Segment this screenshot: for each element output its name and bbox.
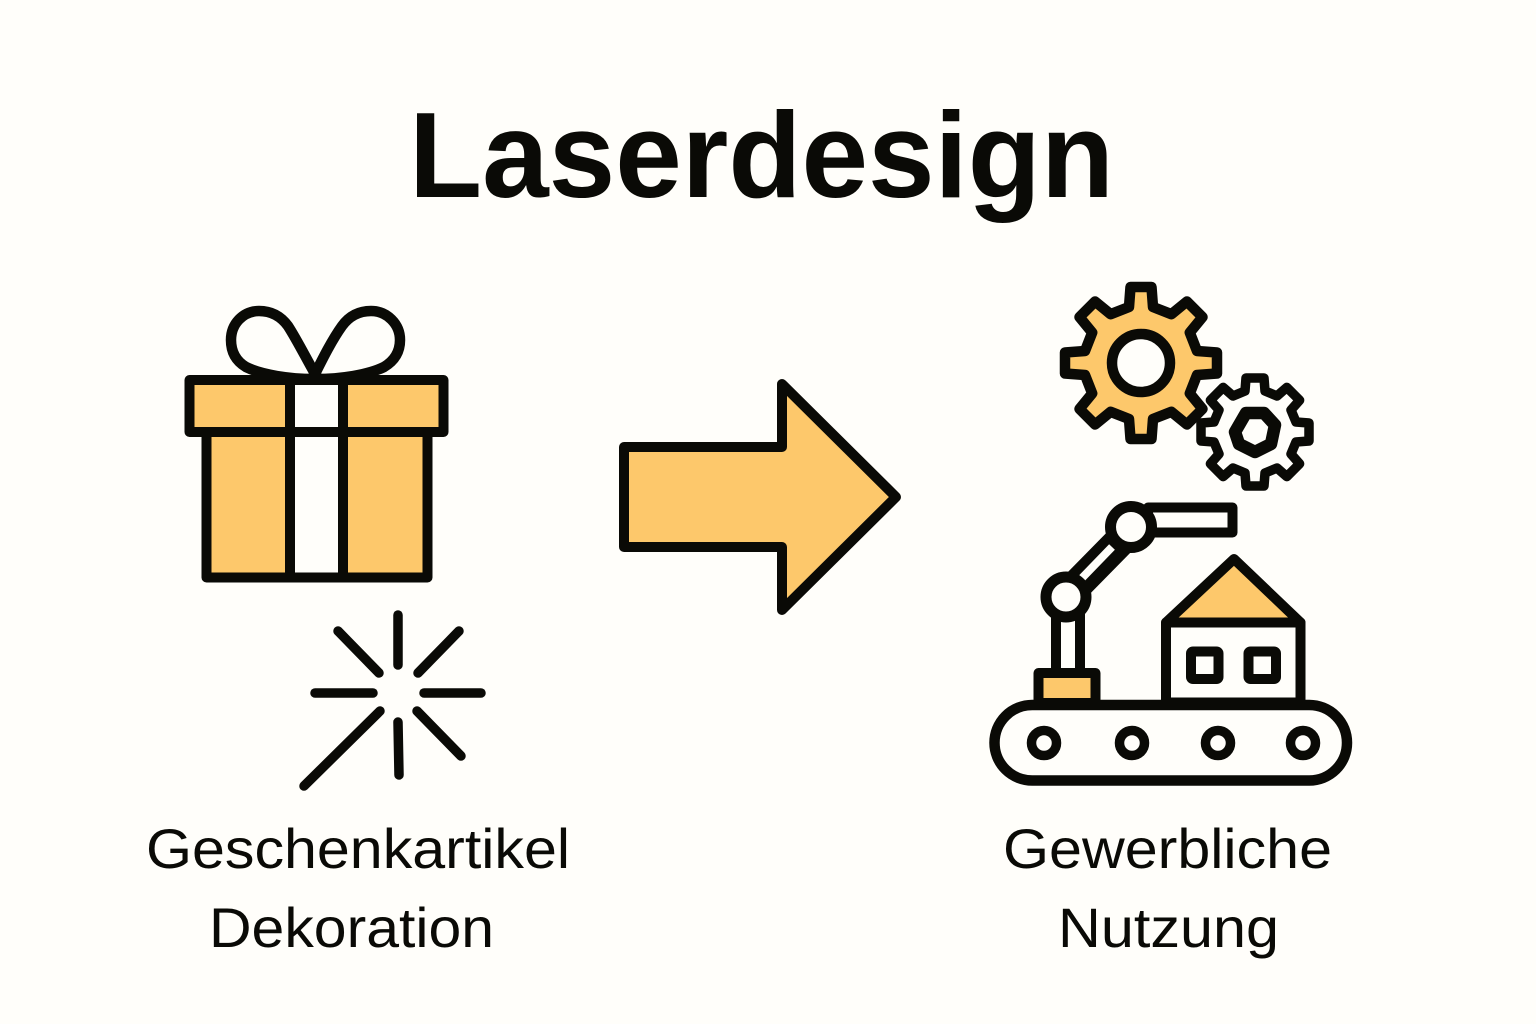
- icon: gift box: [190, 311, 444, 578]
- robot lower joint: [1046, 577, 1086, 617]
- robot forearm: [1148, 508, 1232, 532]
- house window left: [1191, 652, 1218, 679]
- robot base: [1038, 673, 1096, 703]
- icon: large gear: [1065, 287, 1217, 439]
- icon: laser sparkle: [304, 615, 481, 786]
- house window right: [1248, 652, 1276, 679]
- title: Laserdesign: [409, 87, 1114, 223]
- icon: robot arm: [1038, 506, 1232, 703]
- label: gift items: [146, 817, 570, 959]
- label: gift items: Dekoration: [209, 896, 494, 959]
- label: gift items: Geschenkartikel: [146, 817, 570, 880]
- panel: commercial use: [994, 287, 1347, 959]
- panel: gift items: [146, 311, 570, 959]
- icon: small gear: [1201, 378, 1309, 486]
- icon: factory house: [1166, 559, 1300, 702]
- gift lid: [190, 380, 444, 432]
- house roof: [1166, 559, 1300, 622]
- gift body: [206, 432, 428, 578]
- house wall: [1166, 622, 1300, 702]
- robot upper arm: [1070, 533, 1128, 592]
- label: commercial use: [1003, 817, 1332, 959]
- label: commercial use: Gewerbliche: [1003, 817, 1332, 880]
- arrow: [624, 384, 896, 610]
- robot upper joint: [1110, 506, 1152, 548]
- gift bow: [231, 311, 400, 379]
- icon: conveyor belt: [994, 705, 1347, 780]
- label: commercial use: Nutzung: [1058, 896, 1279, 959]
- gift ribbon: [290, 380, 343, 578]
- robot lower arm: [1056, 610, 1080, 673]
- conveyor wheels: [1032, 730, 1316, 756]
